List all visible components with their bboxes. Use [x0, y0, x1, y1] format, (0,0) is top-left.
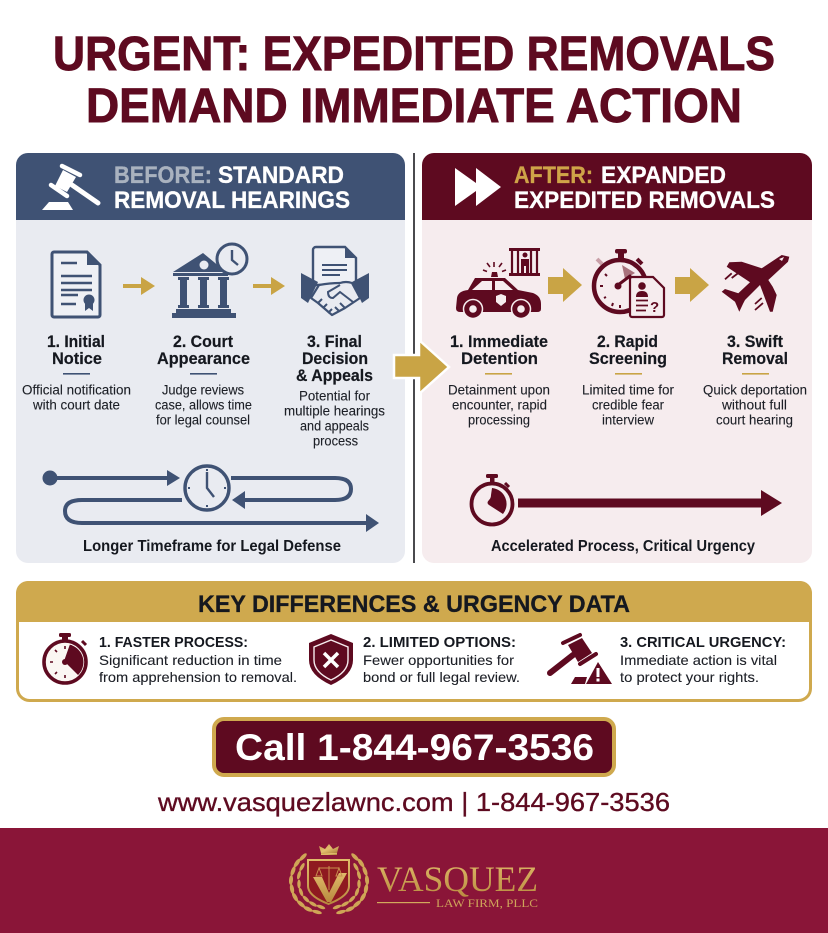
step 1 text: with court date	[32, 398, 120, 412]
after heading: AFTER:	[514, 162, 593, 189]
step 3 text	[703, 332, 807, 428]
step 3 text: court hearing	[716, 412, 793, 428]
item 2 text: Fewer opportunities for	[363, 652, 514, 668]
after heading: EXPEDITED REMOVALS	[514, 187, 775, 214]
step 3 text: process	[313, 434, 358, 448]
step 3 text: without full	[721, 398, 787, 412]
icon: white gavel	[42, 166, 98, 210]
call button	[214, 719, 614, 775]
icon: notice document	[52, 252, 100, 317]
footer band	[0, 828, 828, 933]
logo wordmark: LAW FIRM, PLLC	[436, 896, 538, 910]
arrow: step 1 to 2	[123, 277, 155, 295]
before heading: STANDARD	[218, 162, 344, 189]
title: URGENT: EXPEDITED REMOVALS	[53, 28, 775, 81]
step 3 text	[284, 332, 385, 448]
item 1 text: from apprehension to removal.	[99, 669, 297, 685]
step 2 text: interview	[602, 412, 654, 428]
step 1 text	[448, 332, 550, 428]
step 1 text: encounter, rapid	[452, 398, 547, 412]
logo emblem	[289, 844, 369, 915]
before heading: BEFORE:	[114, 162, 212, 189]
icon: stopwatch	[44, 633, 86, 683]
step 3 text: Decision	[302, 349, 368, 368]
step 1 text: 1. Immediate	[450, 332, 548, 351]
website and phone line: www.vasquezlawnc.com | 1-844-967-3536	[157, 787, 670, 817]
step 2 text: Screening	[589, 349, 667, 368]
icon: shield with x	[309, 634, 353, 685]
icon: police car and jail bars	[456, 248, 541, 318]
center divider	[413, 153, 415, 563]
item 2 text: bond or full legal review.	[363, 669, 520, 685]
after heading	[514, 162, 775, 214]
item 1 text: Significant reduction in time	[99, 652, 282, 668]
step 2 text: 2. Rapid	[597, 332, 658, 351]
step 3 text: 3. Final	[307, 332, 362, 351]
panel: key differences and urgency data	[16, 581, 812, 700]
step 3 text: Removal	[722, 349, 788, 368]
caption: longer timeframe: Longer Timeframe for Legal Defense	[83, 538, 341, 555]
big transition arrow	[394, 340, 449, 394]
step 3 text: 3. Swift	[727, 332, 783, 351]
item 3 text	[620, 634, 786, 685]
icon: airplane	[722, 255, 789, 312]
step 1 text: Official notification	[22, 382, 131, 398]
step 1 text	[22, 332, 131, 412]
logo wordmark: VASQUEZ	[377, 859, 538, 899]
key differences heading: KEY DIFFERENCES & URGENCY DATA	[198, 591, 630, 618]
after heading: EXPANDED	[601, 162, 726, 189]
icon: stopwatch and screening form: ?	[650, 299, 659, 316]
arrow: step 2 to 3	[253, 277, 285, 295]
icon: courthouse with clock	[172, 244, 247, 318]
icon: gavel with warning	[550, 635, 612, 684]
panel: before standard removal hearings	[16, 153, 405, 563]
step 2 text: Limited time for	[582, 382, 675, 398]
step 1 text: processing	[468, 412, 530, 428]
before heading: REMOVAL HEARINGS	[114, 187, 350, 214]
step 2 text	[582, 332, 675, 428]
longer winding timeline	[42, 466, 379, 532]
panel: after expanded expedited removals	[422, 153, 812, 563]
step 3 text: Quick deportation	[703, 382, 807, 398]
step 2 text: Appearance	[157, 349, 250, 368]
item 1 text	[99, 634, 297, 685]
step 2 text: case, allows time	[155, 398, 252, 412]
step 3 text: multiple hearings	[284, 404, 385, 418]
step 2 text: 2. Court	[173, 332, 233, 351]
step 2 text	[155, 332, 252, 428]
icon: fast forward	[455, 168, 501, 206]
item 2 text	[363, 634, 520, 685]
icon: handshake with document	[301, 247, 369, 315]
item 1 text: 1. FASTER PROCESS:	[99, 634, 248, 651]
step 1 text: Notice	[52, 349, 102, 368]
step 1 text: Detention	[461, 349, 538, 368]
arrow: step 1 to 2	[548, 268, 582, 302]
step 2 text: credible fear	[592, 398, 664, 412]
arrow: step 2 to 3	[675, 268, 709, 302]
before heading	[114, 162, 350, 214]
step 3 text: and appeals	[300, 418, 369, 434]
item 2 text: 2. LIMITED OPTIONS:	[363, 634, 516, 651]
step 1 text: 1. Initial	[47, 332, 105, 351]
step 3 text: & Appeals	[296, 366, 373, 385]
step 3 text: Potential for	[299, 388, 370, 404]
step 2 text: Judge reviews	[162, 382, 244, 398]
step 2 text: for legal counsel	[156, 412, 250, 428]
straight accelerated timeline	[472, 474, 782, 524]
caption: accelerated process: Accelerated Process, Critical Urgency	[491, 538, 755, 555]
title: DEMAND IMMEDIATE ACTION	[86, 80, 742, 133]
item 3 text: 3. CRITICAL URGENCY:	[620, 634, 786, 651]
icon: stopwatch and screening form	[594, 249, 664, 317]
call button: Call 1-844-967-3536	[235, 727, 594, 768]
item 3 text: to protect your rights.	[620, 669, 759, 685]
item 3 text: Immediate action is vital	[620, 652, 777, 668]
step 1 text: Detainment upon	[448, 382, 550, 398]
title	[53, 28, 775, 133]
